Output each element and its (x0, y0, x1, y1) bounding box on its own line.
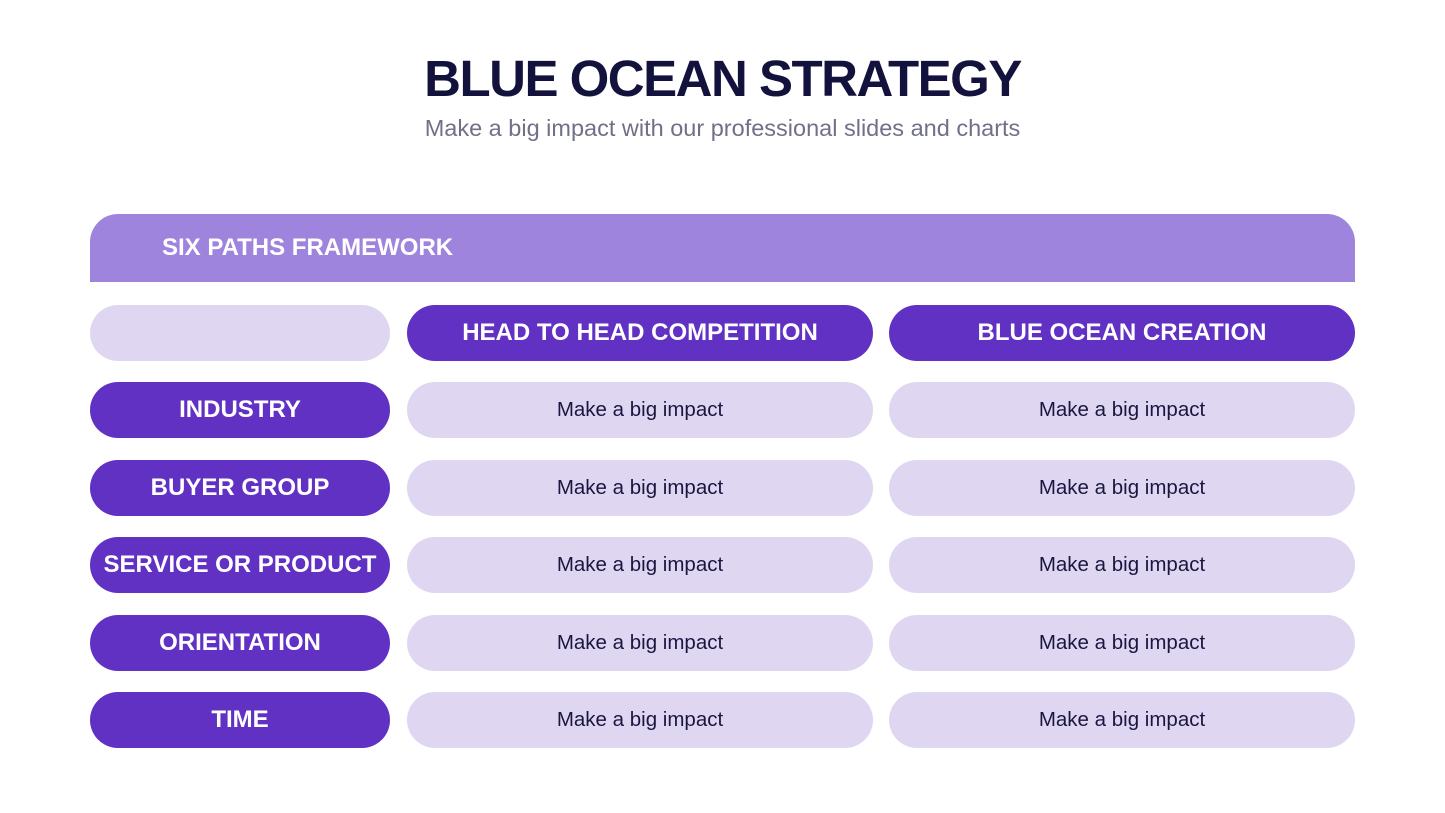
cell (407, 460, 873, 516)
cell (407, 692, 873, 748)
cell: Make a big impact (1039, 476, 1205, 499)
cell: Make a big impact (557, 631, 723, 654)
cell (889, 537, 1355, 593)
row: service or product (90, 537, 390, 593)
cell (889, 692, 1355, 748)
cell (407, 537, 873, 593)
column header: head to head (407, 305, 873, 361)
cell: Make a big impact (1039, 553, 1205, 576)
row: service or product: SERVICE OR PRODUCT (104, 551, 376, 578)
header bar: SIX PATHS FRAMEWORK (162, 234, 453, 261)
row: time (90, 692, 390, 748)
empty corner (90, 305, 390, 361)
row: industry (90, 382, 390, 438)
cell (889, 615, 1355, 671)
row: industry: INDUSTRY (179, 396, 301, 423)
cell: Make a big impact (1039, 398, 1205, 421)
cell (407, 615, 873, 671)
cell: Make a big impact (557, 708, 723, 731)
row: time: TIME (211, 706, 269, 733)
header bar (90, 214, 1355, 282)
column header: head to head: HEAD TO HEAD COMPETITION (462, 319, 818, 346)
row: buyer group: BUYER GROUP (151, 474, 329, 501)
row: orientation (90, 615, 390, 671)
cell: Make a big impact (557, 476, 723, 499)
cell: Make a big impact (557, 553, 723, 576)
cell: Make a big impact (1039, 631, 1205, 654)
column header: blue ocean (889, 305, 1355, 361)
title: BLUE OCEAN STRATEGY (424, 50, 1021, 106)
row: buyer group (90, 460, 390, 516)
cell (889, 382, 1355, 438)
cell (407, 382, 873, 438)
subtitle: Make a big impact with our professional slides and charts (425, 114, 1020, 140)
cell (889, 460, 1355, 516)
column header: blue ocean: BLUE OCEAN CREATION (978, 319, 1266, 346)
cell: Make a big impact (1039, 708, 1205, 731)
cell: Make a big impact (557, 398, 723, 421)
row: orientation: ORIENTATION (159, 629, 321, 656)
